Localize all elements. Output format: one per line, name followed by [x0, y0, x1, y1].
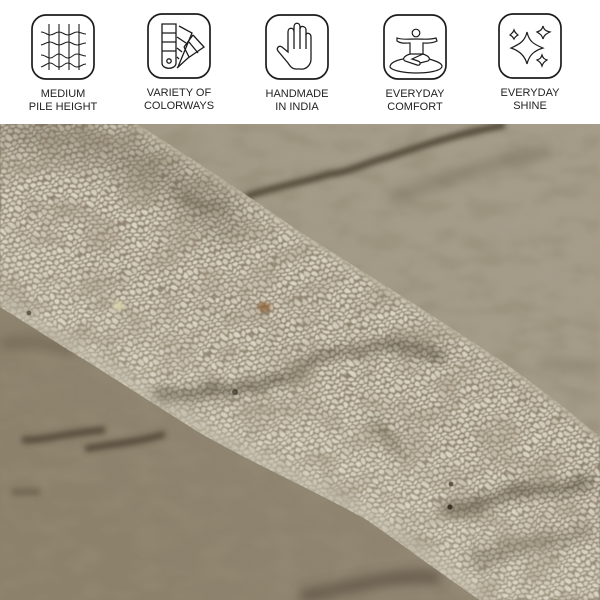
label: EVERYDAY	[386, 88, 444, 100]
header strip	[0, 0, 600, 124]
icon: hand	[265, 14, 329, 80]
feature: medium pile height	[29, 14, 97, 113]
label: COMFORT	[387, 101, 443, 113]
label: EVERYDAY	[501, 87, 559, 99]
feature: variety of colorways	[144, 13, 214, 112]
broad shade: upper-left of roll	[0, 130, 240, 230]
label	[29, 88, 97, 113]
rolled rug	[0, 124, 600, 600]
label: IN INDIA	[275, 101, 319, 113]
photo background: flat rug surface	[0, 124, 600, 600]
icon: colour swatch fan	[147, 13, 211, 79]
mottled shading on roll	[0, 124, 600, 600]
dark stripes: lower left	[22, 430, 165, 449]
dark stripe: upper right	[245, 125, 505, 197]
icon: meditating figure	[383, 14, 447, 80]
label: COLORWAYS	[144, 100, 214, 112]
smooth pale roll edges	[0, 303, 480, 597]
label	[144, 87, 214, 112]
label: MEDIUM	[41, 88, 85, 100]
label: SHINE	[513, 100, 547, 112]
label: PILE HEIGHT	[29, 101, 97, 113]
label: HANDMADE	[266, 88, 328, 100]
feature: everyday comfort	[383, 14, 447, 113]
label	[386, 88, 444, 113]
label	[266, 88, 328, 113]
roll mottling: brown streaks	[155, 347, 445, 394]
icon: sparkles	[498, 13, 562, 79]
photo: rolled rug close-up	[0, 124, 600, 600]
feature: handmade in india	[265, 14, 329, 113]
icon: pile	[31, 14, 95, 80]
dark band: right of stripe	[390, 150, 550, 200]
yarn loop texture	[0, 124, 600, 600]
label: VARIETY OF	[147, 87, 211, 99]
feature: everyday shine	[498, 13, 562, 112]
label	[501, 87, 560, 112]
